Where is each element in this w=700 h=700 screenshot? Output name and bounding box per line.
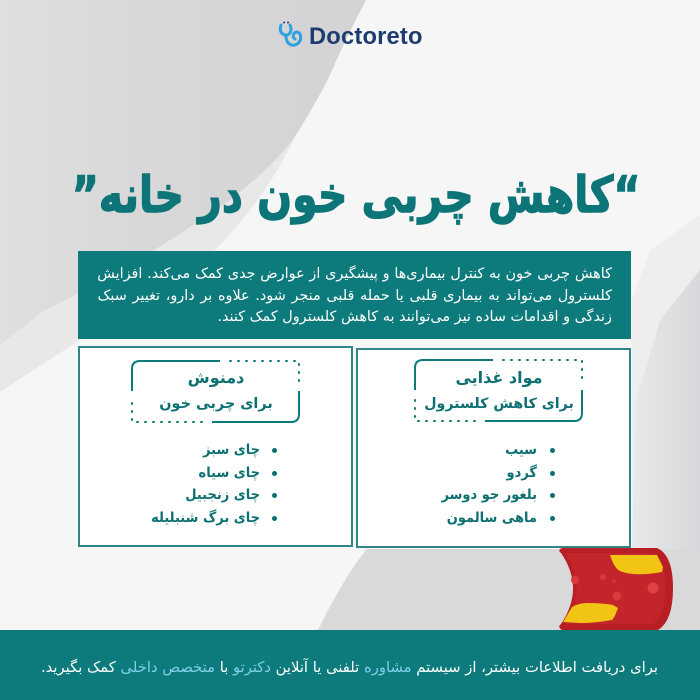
- heading: herbal teas: دمنوش: [188, 368, 244, 387]
- list: herbal teas: چای برگ شنبلیله: [151, 510, 260, 526]
- illustration: artery with plaque: [559, 548, 673, 630]
- list: foods: [440, 442, 537, 526]
- logo: [278, 22, 423, 50]
- icon: stethoscope: [278, 22, 302, 47]
- intro text: زندگی و اقدامات ساده نیز می‌توانند به کاهش کلسترول کمک کنند.: [217, 309, 612, 325]
- intro text: [97, 265, 612, 325]
- heading: foods: [424, 368, 574, 412]
- list: foods: سیب: [505, 442, 537, 458]
- intro panel: [78, 251, 631, 339]
- list: foods: ماهی سالمون: [447, 510, 537, 526]
- heading: foods: مواد غذایی: [455, 368, 543, 387]
- panel: foods: [356, 348, 631, 548]
- bullets: foods: [550, 448, 555, 521]
- list: herbal teas: چای زنجبیل: [185, 487, 260, 503]
- list: herbal teas: [151, 442, 260, 526]
- heading frame: foods: [414, 359, 583, 422]
- heading frame: herbal teas: [131, 360, 300, 423]
- heading: herbal teas: برای چربی خون: [159, 396, 273, 412]
- heading: herbal teas: [159, 368, 273, 412]
- list: herbal teas: چای سبز: [203, 442, 260, 458]
- list: foods: گردو: [507, 464, 537, 480]
- list: herbal teas: چای سیاه: [199, 464, 260, 480]
- title: “کاهش چربی خون در خانه”: [71, 166, 640, 224]
- footer text: برای دریافت اطلاعات بیشتر، از سیستم مشاوره تلفنی یا آنلاین دکترتو با متخصص داخلی کمک بگیرید.: [41, 659, 658, 676]
- intro text: کلسترول می‌تواند به بیماری قلبی یا حمله قلبی منجر شود. علاوه بر دارو، تغییر سبک: [98, 288, 612, 304]
- logo wordmark: Doctoreto: [309, 24, 423, 50]
- bullets: herbal teas: [272, 448, 277, 521]
- list: foods: بلغور جو دوسر: [441, 487, 537, 503]
- panel: herbal teas: [78, 346, 353, 547]
- intro text: کاهش چربی خون به کنترل بیماری‌ها و پیشگیری از عوارض جدی کمک می‌کند. افزایش: [97, 266, 612, 282]
- heading: foods: برای کاهش کلسترول: [424, 396, 574, 412]
- footer band: [0, 630, 700, 700]
